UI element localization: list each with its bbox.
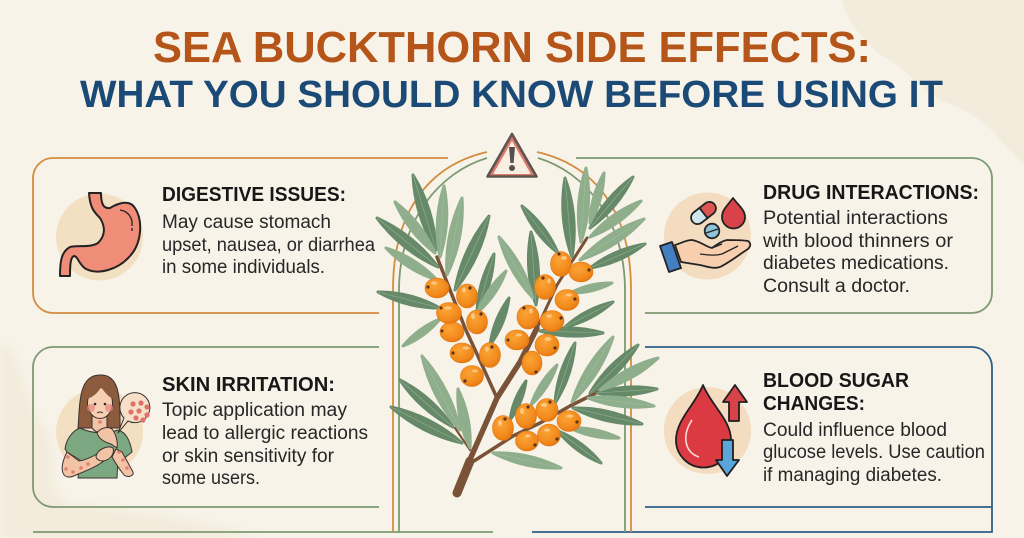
bottom green line [33, 531, 493, 533]
heading: blood sugar changes: CHANGES: [763, 393, 865, 415]
icon: warning triangle [488, 134, 536, 176]
text: digestive issues description: upset, nausea, or diarrhea [162, 235, 375, 256]
text: drug interactions description: with blood thinners or [762, 231, 954, 252]
panel: drug interactions [576, 158, 992, 313]
text: drug interactions description: Potential interactions [763, 208, 948, 229]
text: skin irritation description [162, 400, 368, 489]
heading: skin irritation: SKIN IRRITATION: [162, 374, 335, 396]
icon: hand with pills and drop [660, 192, 751, 280]
icon: stomach [56, 193, 143, 280]
panel: digestive issues [33, 158, 448, 313]
title: WHAT YOU SHOULD KNOW BEFORE USING IT [80, 74, 943, 116]
branch stems [437, 238, 600, 493]
text: digestive issues description: May cause stomach [162, 212, 331, 233]
icon: woman with rash [56, 375, 150, 478]
berries [425, 252, 593, 451]
berry highlights [431, 256, 574, 438]
leaves: light [386, 168, 658, 468]
text: skin irritation description: lead to allergic reactions [162, 423, 368, 444]
central arch frame [393, 152, 631, 532]
text: drug interactions description: Consult a doctor. [763, 276, 910, 297]
title: SEA BUCKTHORN SIDE EFFECTS: [153, 23, 871, 72]
panel: skin irritation [33, 347, 379, 507]
text: blood sugar description: Could influence blood [763, 420, 947, 441]
title [80, 23, 943, 116]
heading: blood sugar changes [763, 370, 910, 415]
text: blood sugar description: if managing diabetes. [763, 465, 942, 486]
text: skin irritation description: Topic application may [162, 400, 348, 421]
text: skin irritation description: or skin sensitivity for [162, 446, 335, 467]
illustration: sea buckthorn branch [377, 168, 658, 493]
text: digestive issues description: in some individuals. [162, 257, 325, 278]
text: blood sugar description [763, 420, 985, 486]
text: blood sugar description: glucose levels. Use caution [763, 442, 985, 463]
leaves: dark [377, 175, 657, 463]
heading: drug interactions: DRUG INTERACTIONS: [763, 182, 979, 204]
text: drug interactions description [762, 208, 954, 297]
berry tips [426, 252, 591, 447]
heading: blood sugar changes: BLOOD SUGAR [763, 370, 910, 392]
panel: blood sugar changes [532, 347, 992, 532]
text: drug interactions description: diabetes medications. [763, 253, 949, 274]
leaf midribs [377, 168, 657, 468]
text: skin irritation description: some users. [162, 468, 260, 489]
text: digestive issues description [162, 212, 375, 278]
icon: blood drop with arrows [664, 385, 751, 476]
heading: digestive issues: DIGESTIVE ISSUES: [162, 184, 346, 206]
